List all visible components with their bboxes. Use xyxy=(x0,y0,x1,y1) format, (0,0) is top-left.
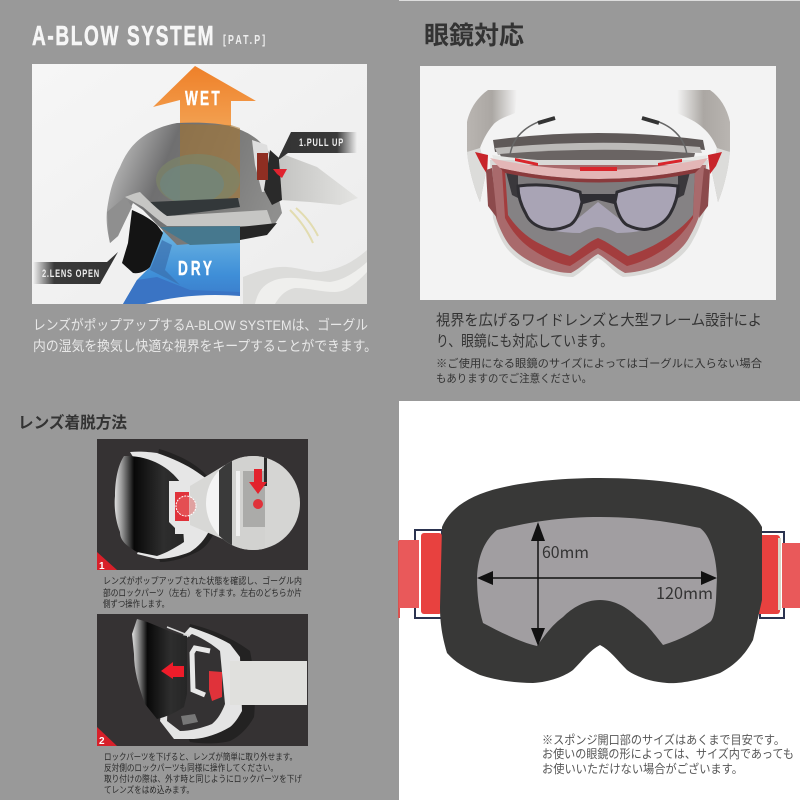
arrow: remove lens xyxy=(161,662,184,679)
panel: sponge opening size xyxy=(398,401,800,800)
goggle top frame xyxy=(475,152,722,218)
goggle lens xyxy=(490,118,708,277)
text block: sponge size note: お使いいただけない場合がございます。 xyxy=(542,761,743,776)
text block: A-BLOW description: 内の湿気を換気し快適な視界をキープすることができます。 xyxy=(33,338,377,354)
text block: A-BLOW description xyxy=(33,317,377,354)
step badge 2 xyxy=(97,727,117,747)
text block: step 1: 部のロックパーツ（左右）を下げます。左右のどちらか片 xyxy=(103,587,302,598)
lens opening xyxy=(477,517,717,646)
text block: step 1: レンズがポップアップされた状態を確認し、ゴーグル内 xyxy=(103,575,302,586)
goggle body xyxy=(107,123,287,273)
goggle foam top xyxy=(492,133,708,166)
text block: glasses note: もありますのでご注意ください。 xyxy=(436,371,592,385)
text block: step 1: 側ずつ操作します。 xyxy=(103,598,169,609)
text block: sponge size note xyxy=(542,732,794,776)
panel: A-BLOW SYSTEM xyxy=(32,20,377,354)
text block: step 2: 反対側のロックパーツも同様に操作してください。 xyxy=(104,762,278,773)
panel: glasses compatibility xyxy=(399,0,800,385)
callout: 1.PULL UP: 1.PULL UP xyxy=(299,135,343,148)
goggle strap xyxy=(243,153,367,304)
text block: step 2: ロックパーツを下げると、レンズが簡単に取り外せます。 xyxy=(104,751,297,762)
text block: A-BLOW description: レンズがポップアップするA-BLOW SYSTEMは、ゴーグル xyxy=(33,317,368,333)
eyeglasses xyxy=(506,118,690,233)
magnified detail xyxy=(206,456,300,550)
heading: A-BLOW SYSTEM: A-BLOW SYSTEM xyxy=(32,20,214,52)
dimension: width 120mm: 120mm xyxy=(656,580,713,604)
goggle strap xyxy=(399,530,800,618)
illustration: goggle with glasses inside xyxy=(420,66,776,300)
illustration: step 1 xyxy=(97,439,308,572)
step badge 1: 1 xyxy=(99,561,105,572)
dimension: width 120mm xyxy=(477,571,717,604)
step badge 2: 2 xyxy=(99,736,105,747)
text block: glasses note: ※ご使用になる眼鏡のサイズによってはゴーグルに入らない場合 xyxy=(436,356,762,370)
callout: 2.LENS OPEN xyxy=(33,252,118,284)
heading: 眼鏡対応: 眼鏡対応 xyxy=(424,22,524,50)
text block: step 2 xyxy=(104,751,302,795)
arrow: WET xyxy=(153,66,256,126)
red lock part xyxy=(257,153,268,180)
dimension: height 60mm: 60mm xyxy=(542,539,589,563)
text block: glasses description: 視界を広げるワイドレンズと大型フレーム設計によ xyxy=(436,312,762,329)
arrow: WET: WET xyxy=(185,87,220,110)
goggle in step 1 xyxy=(115,449,225,562)
text block: step 1 xyxy=(103,575,302,609)
goggle strap xyxy=(467,90,730,202)
callout: 2.LENS OPEN: 2.LENS OPEN xyxy=(42,266,99,279)
illustration: airflow through goggle xyxy=(32,64,367,304)
panel: lens removal xyxy=(18,413,308,795)
heading tag: PAT.P: [PAT.P] xyxy=(223,33,265,48)
callout: 1.PULL UP xyxy=(277,132,357,161)
goggle sponge xyxy=(440,478,762,683)
text block: step 2: てレンズをはめ込みます。 xyxy=(104,784,194,795)
text block: glasses note xyxy=(436,356,762,385)
arrow: DRY xyxy=(123,230,240,304)
text block: step 2: 取り付けの際は、外す時と同じようにロックパーツを下げ xyxy=(104,773,302,784)
text block: sponge size note: ※スポンジ開口部のサイズはあくまで目安です。 xyxy=(542,732,785,747)
step badge 1 xyxy=(97,552,117,572)
text block: glasses description: り、眼鏡にも対応しています。 xyxy=(436,333,613,350)
illustration: step 2 xyxy=(97,614,308,747)
arrow: DRY: DRY xyxy=(178,257,212,280)
text block: glasses description xyxy=(436,312,762,350)
goggle in step 2 xyxy=(132,619,307,743)
heading: レンズ着脱方法: レンズ着脱方法 xyxy=(18,413,127,432)
dimension: height 60mm xyxy=(531,522,589,646)
